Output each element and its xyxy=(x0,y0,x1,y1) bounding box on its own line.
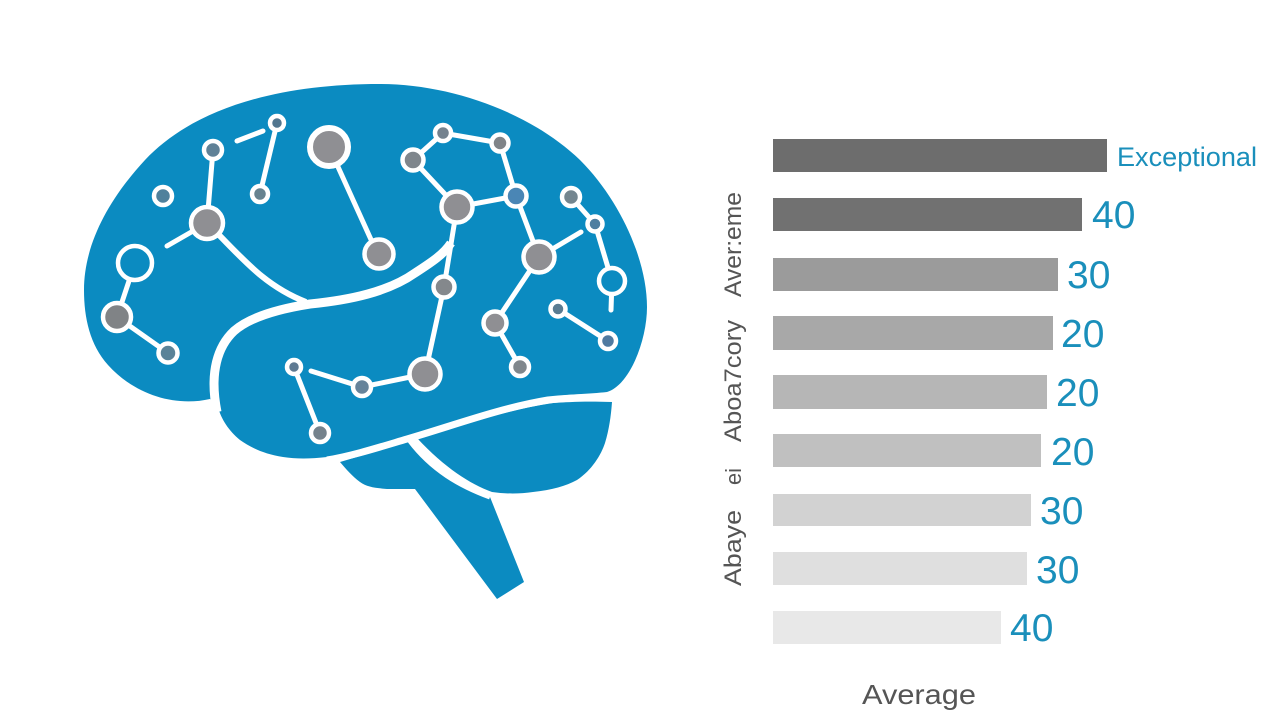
network nodes xyxy=(103,116,625,442)
bar: 20 xyxy=(773,431,1094,474)
bar: 30 xyxy=(773,254,1110,297)
brain cerebrum xyxy=(84,84,647,458)
x-axis label: Average: Average xyxy=(862,679,976,710)
bar: 30: 30 xyxy=(1040,490,1083,533)
axis label: 6i: ei xyxy=(721,468,746,485)
bar: 20: 20 xyxy=(1061,313,1104,356)
brain illustration xyxy=(84,84,647,599)
axis label: Average: Aver:eme xyxy=(720,192,747,297)
axis label: Abaye: Abaye xyxy=(720,510,747,586)
brain stem xyxy=(340,442,524,599)
bar: Exceptional xyxy=(773,139,1257,172)
bar: 20: 20 xyxy=(1056,372,1099,415)
bar: 20 xyxy=(773,372,1099,415)
bar: 30: 30 xyxy=(1067,254,1110,297)
rotated axis labels xyxy=(720,192,747,586)
bar: 20 xyxy=(773,313,1104,356)
bar chart xyxy=(773,139,1257,650)
bar: 20: 20 xyxy=(1051,431,1094,474)
bar: 30 xyxy=(773,490,1083,533)
brain fold lines xyxy=(207,223,612,497)
bar: 40: 40 xyxy=(1010,607,1053,650)
bar: 40 xyxy=(773,194,1135,237)
network connector lines xyxy=(117,123,612,433)
bar: 40 xyxy=(773,607,1053,650)
bar: Exceptional: Exceptional xyxy=(1117,142,1257,172)
bar: 30 xyxy=(773,549,1079,592)
brain cerebellum xyxy=(417,402,612,494)
bar: 40: 40 xyxy=(1092,194,1135,237)
axis label: Abo47cory: Aboa7cory xyxy=(720,320,747,442)
bar: 30: 30 xyxy=(1036,549,1079,592)
